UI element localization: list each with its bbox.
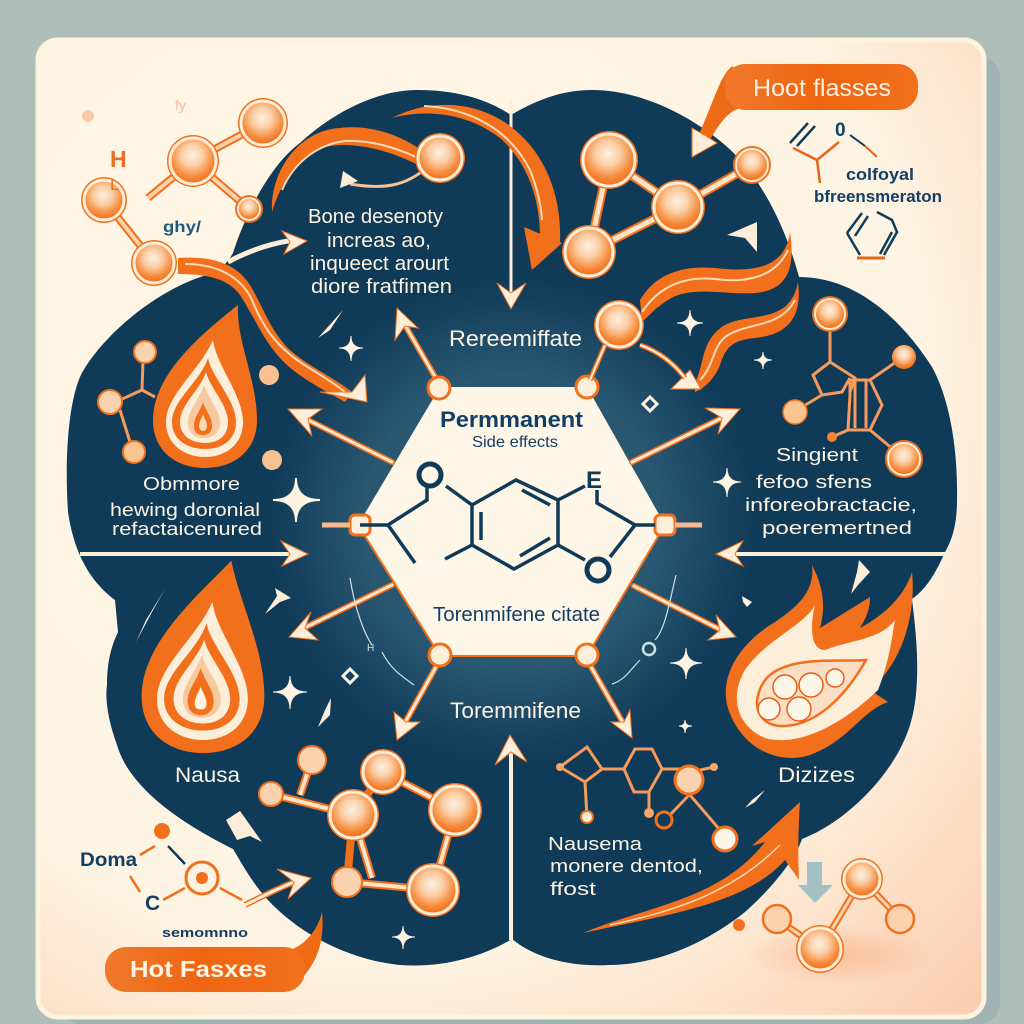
- text block: left: hewing doronial: [110, 500, 260, 520]
- hexagon corner nodes: [322, 376, 702, 666]
- text block: bone density: diore fratfimen: [311, 276, 452, 298]
- text block: right: [745, 445, 917, 538]
- molecule top left: [81, 98, 288, 286]
- hexagon lower orange edge: [358, 525, 665, 656]
- small diamond markers: [343, 397, 657, 683]
- text block: left: [110, 474, 262, 539]
- swoosh from molecule to center: [178, 258, 367, 402]
- lightning bolts: [136, 310, 870, 842]
- peach dot: [82, 110, 94, 122]
- dot: [262, 450, 282, 470]
- text block: bone density: increas ao,: [327, 230, 431, 252]
- text block: bottom: ffost: [550, 879, 596, 899]
- molecule top right: [562, 131, 771, 279]
- label Doma: Doma: [80, 850, 137, 871]
- text block: right: fefoo sfens: [756, 472, 872, 492]
- text block: right: poeremertned: [762, 518, 912, 538]
- callout: hot flashes top: [692, 64, 918, 157]
- chemical sketch bottom left: [130, 823, 242, 900]
- molecule bottom center-left: [259, 746, 482, 917]
- icon: left small molecule: [98, 341, 156, 463]
- callout: hot flashes bottom: [105, 912, 323, 992]
- central heading: Permmanent: [440, 407, 584, 432]
- icon: flame left: [153, 305, 257, 468]
- label semomnno: semomnno: [162, 925, 248, 940]
- dot: [259, 365, 279, 385]
- text block: right: Singient: [776, 445, 858, 465]
- navy label bottom: Toremmifene: [450, 698, 581, 723]
- horizontal arrow left: [80, 541, 308, 566]
- text block: bone density: [308, 206, 452, 298]
- atom label L: L: [110, 175, 119, 194]
- orange arrow bottom right: [583, 802, 800, 933]
- chemical sketch top right: [790, 123, 897, 258]
- text block: right: inforeobractacie,: [745, 495, 917, 515]
- text block: left: Obmmore: [143, 474, 240, 494]
- callout: hot flashes top: Hoot flasses: [753, 75, 891, 102]
- molecule right: [783, 296, 923, 478]
- text block: left: refactaicenured: [112, 519, 262, 539]
- caption top right line 1: colfoyal: [846, 165, 914, 184]
- atom label H: H: [110, 146, 127, 172]
- callout: hot flashes bottom: Hot Fasxes: [130, 956, 267, 982]
- big curved arrow top: [392, 105, 562, 270]
- ball top center: [415, 133, 465, 183]
- icon: flame lower left: [142, 561, 264, 753]
- vertical divider arrow top: [497, 100, 526, 309]
- left swoosh top: [272, 127, 424, 212]
- text block: bottom: Nausema: [548, 834, 643, 854]
- wavy swoosh upper: [640, 232, 792, 322]
- molecule bottom right: [763, 858, 914, 973]
- label: E atom: E: [586, 467, 602, 494]
- soft peach shadow: [745, 925, 935, 985]
- cream arrow bottom left: [245, 869, 311, 905]
- central hexagon: [358, 387, 665, 656]
- icon: large flame right: [726, 565, 913, 758]
- text block: bone density: Bone desenoty: [308, 206, 443, 228]
- text block: bone density: inqueect arourt: [310, 253, 449, 275]
- cream arrow to bone density text: [228, 231, 307, 262]
- label: nausea left: Nausa: [175, 764, 240, 787]
- label C: C: [145, 892, 160, 915]
- small text: ghy/: [163, 219, 202, 236]
- cream arrowhead marker: [727, 222, 757, 252]
- ball with connectors: [590, 300, 685, 380]
- orange dot: [733, 919, 745, 931]
- wavy swoosh lower: [671, 282, 799, 392]
- label: dizziness: Dizizes: [778, 764, 855, 787]
- central caption: Torenmifene citate: [433, 604, 600, 626]
- radial arrows from hexagon: [288, 308, 740, 740]
- thin arcs in glow: [350, 575, 676, 685]
- molecule bottom center-right: [556, 747, 737, 851]
- small H mark: H: [367, 643, 374, 654]
- horizontal arrow right: [716, 541, 945, 566]
- text block: bottom: [548, 834, 703, 899]
- sparkle stars: [273, 310, 772, 949]
- caption top right line 2: bfreensmeraton: [814, 187, 942, 206]
- atom label O: 0: [835, 120, 846, 141]
- panel: central navy lobed shape: [67, 90, 957, 966]
- grey-blue arrow down: [798, 862, 833, 903]
- faint text: fy: [175, 97, 186, 113]
- navy label top: Rereemiffate: [449, 326, 582, 351]
- central molecule diagram: [360, 464, 655, 581]
- vertical divider arrow bottom: [495, 735, 527, 940]
- central subheading: Side effects: [472, 434, 558, 451]
- text block: bottom: monere dentod,: [550, 856, 703, 876]
